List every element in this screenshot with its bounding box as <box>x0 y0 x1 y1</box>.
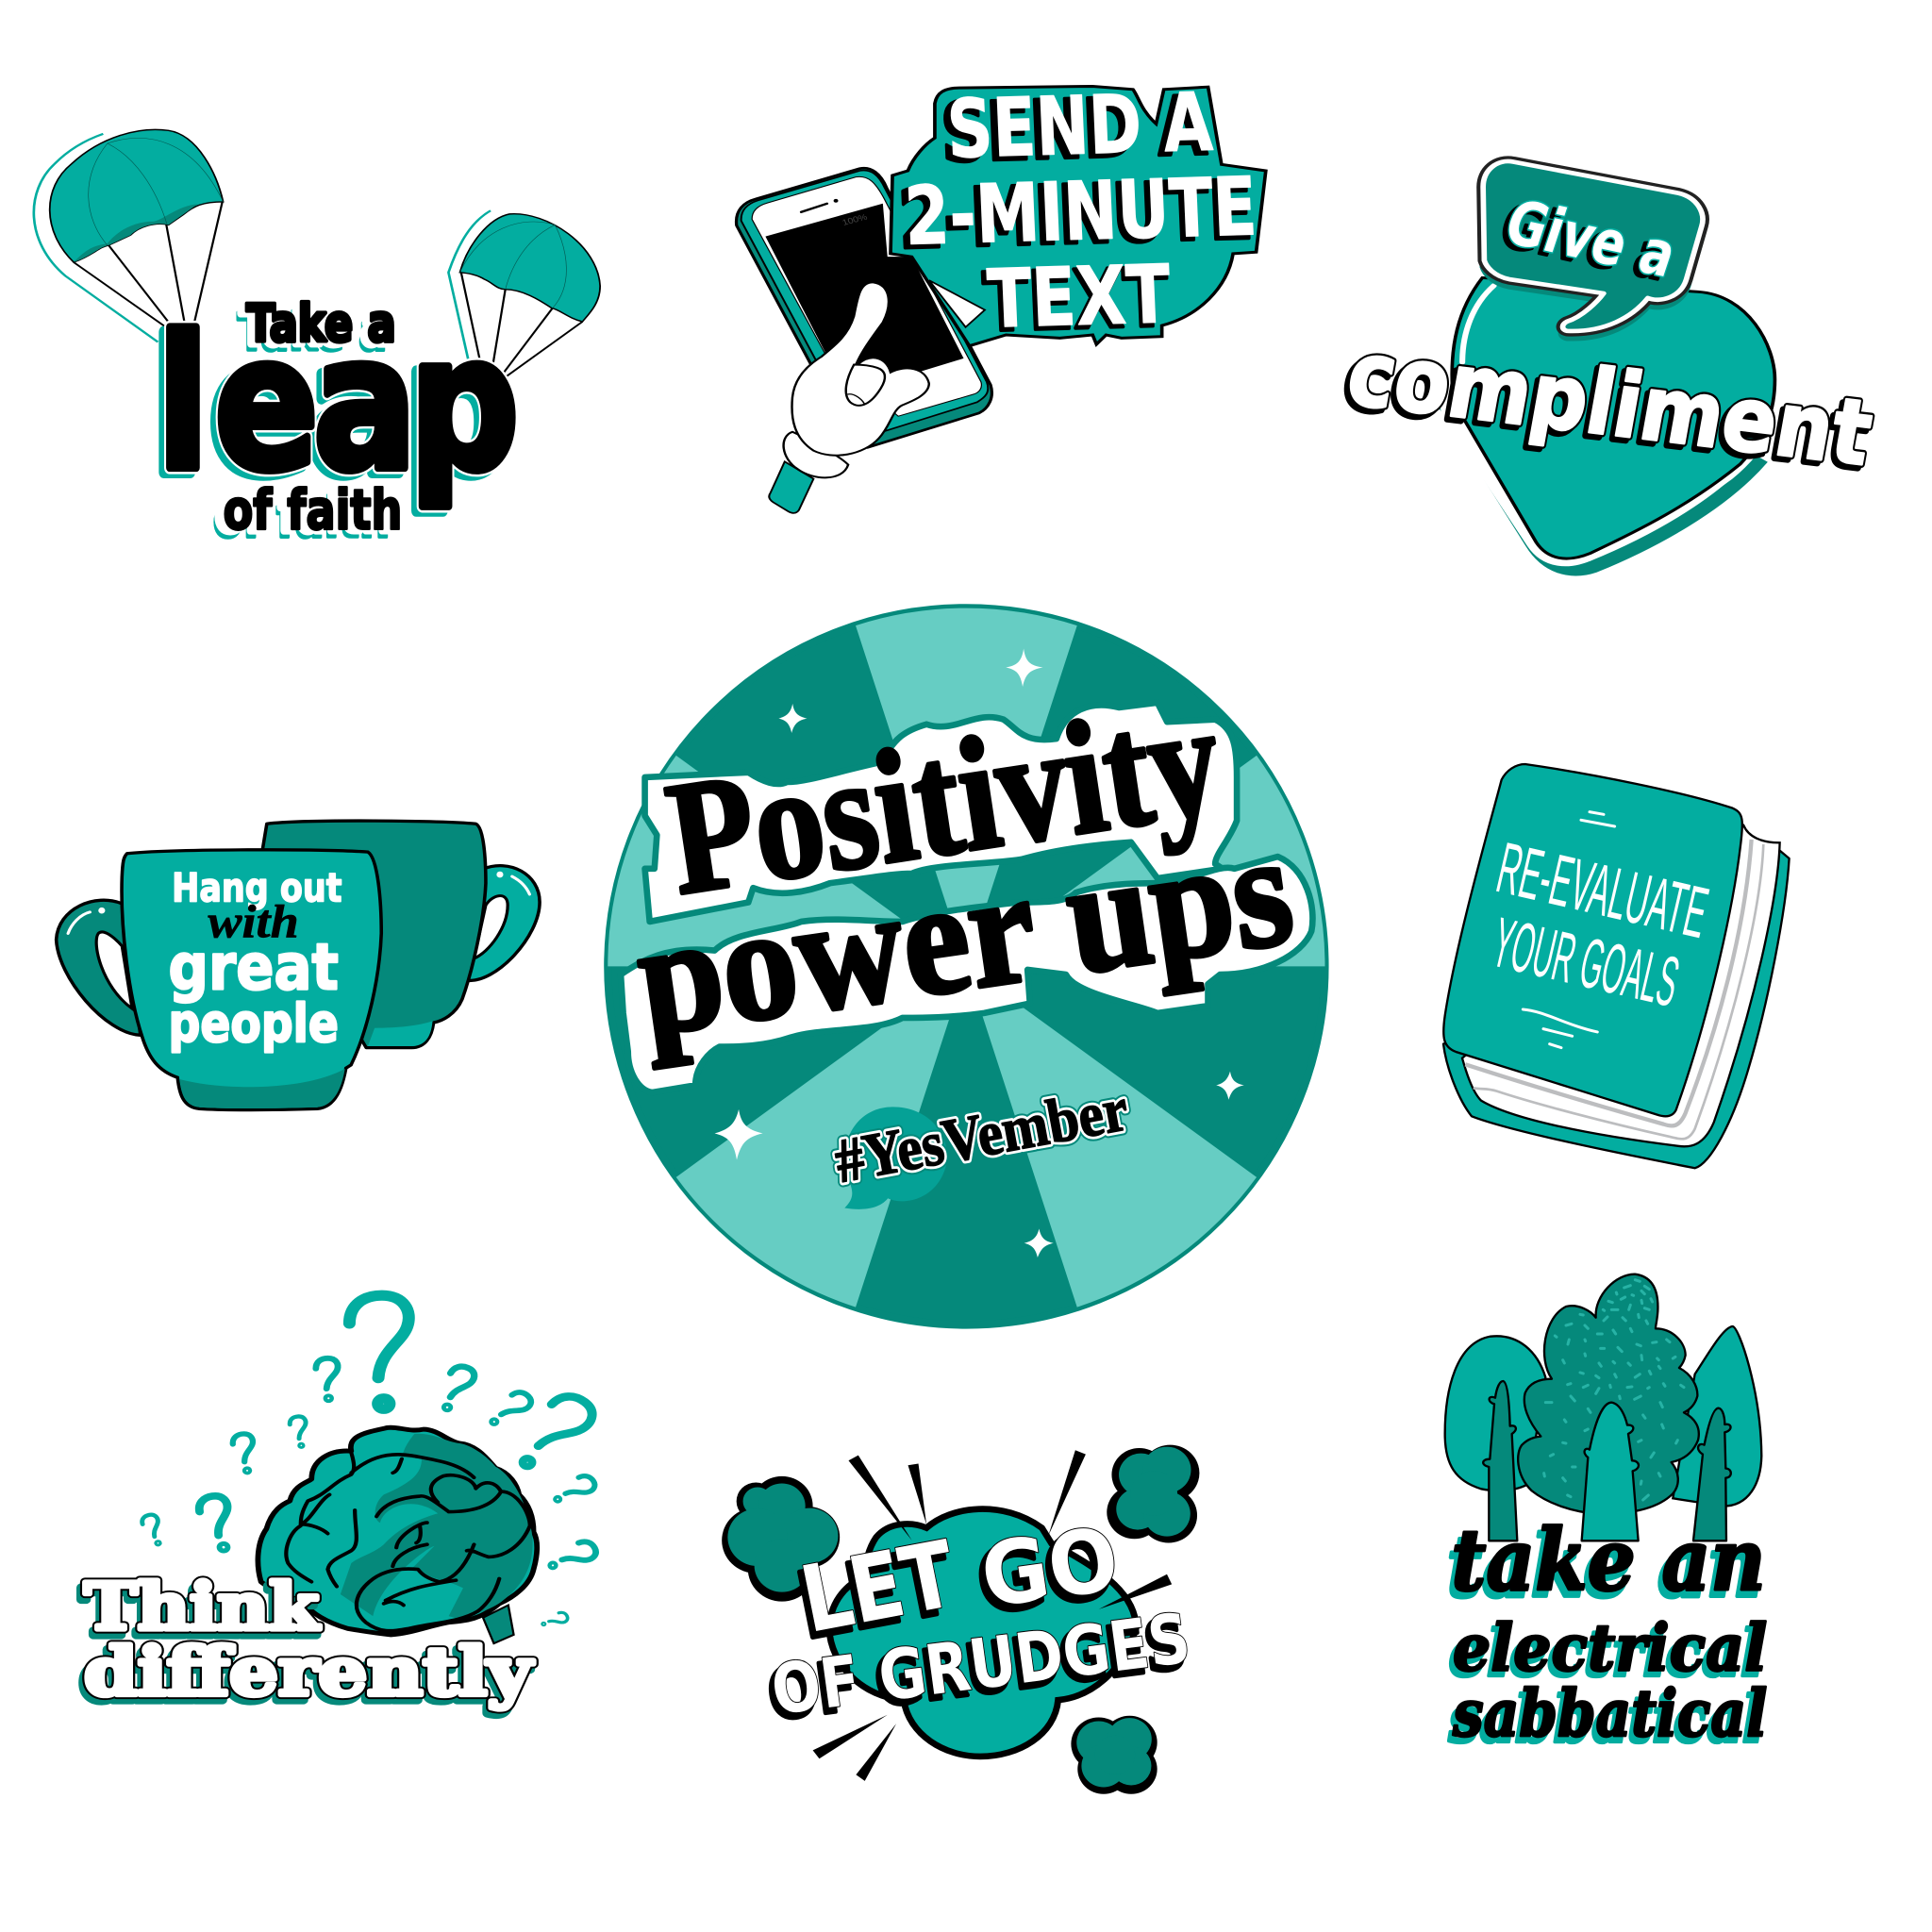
icon: pointing hand <box>791 282 929 456</box>
heading: SEND A <box>939 75 1214 180</box>
heading: of faith <box>213 479 402 550</box>
icon: tree trunks <box>1483 1381 1731 1541</box>
icon: book pages <box>1462 825 1780 1146</box>
heading: take an: take an <box>1447 1518 1761 1617</box>
heading: Take a <box>238 295 396 362</box>
heading: TEXT: TEXT <box>981 251 1170 350</box>
heading: Give a: Give a <box>1491 191 1679 295</box>
icon: arm <box>769 461 813 513</box>
heading: electrical: electrical <box>1453 1611 1767 1687</box>
sticker: take an electrical sabbatical <box>1445 1274 1767 1757</box>
icon: YesVember bubble <box>844 1107 947 1209</box>
icon: front mug handle <box>57 900 141 1035</box>
heading: differently: differently <box>84 1633 534 1710</box>
heading: SEND A: SEND A <box>939 79 1208 180</box>
heading: TEXT <box>981 247 1173 350</box>
heading: power ups: power ups <box>626 799 1303 1069</box>
heading: OF GRUDGES: OF GRUDGES <box>763 1604 1191 1737</box>
icon: centre tree <box>1518 1274 1699 1514</box>
heading: sabbatical: sabbatical <box>1452 1676 1767 1752</box>
icon: explosion cloud <box>829 1509 1136 1757</box>
heading: Take a: Take a <box>246 295 396 354</box>
sticker: send a 2-minute text <box>737 75 1266 513</box>
heading: LET: LET <box>793 1522 964 1654</box>
panel: speech bubble <box>891 86 1266 346</box>
icon: brain <box>258 1427 537 1635</box>
heading: Think: Think <box>84 1568 320 1645</box>
panel: speech bubble <box>1483 161 1703 338</box>
heading: leap: leap <box>151 301 513 517</box>
sticker: re-evaluate your goals <box>1443 764 1790 1168</box>
icon: book front cover <box>1443 764 1742 1116</box>
icon: back mug <box>260 821 486 1048</box>
heading: YesVember hashtag: #YesVember <box>830 1074 1133 1196</box>
heading: LET: LET <box>793 1522 964 1654</box>
icon: left tree <box>1445 1336 1545 1491</box>
icon: right parachute <box>448 210 600 377</box>
icon: right tree <box>1673 1326 1761 1507</box>
icon: question marks <box>141 1295 599 1628</box>
sticker: let go of grudges <box>722 1445 1199 1794</box>
heading: 2-MINUTE <box>896 159 1258 267</box>
icon: left parachute <box>34 129 224 342</box>
heading: Give a <box>1491 187 1685 295</box>
panel: sunburst circle <box>608 608 1324 1324</box>
heading: YesVember hashtag: #YesVember <box>830 1074 1133 1196</box>
icon: sparkles <box>715 649 1244 1257</box>
icon: small smoke clouds <box>722 1445 1199 1794</box>
heading: LET: LET <box>789 1528 960 1660</box>
heading: great: great <box>169 929 339 1005</box>
heading: leap: leap <box>157 296 519 512</box>
central badge: positivity power ups <box>608 608 1324 1324</box>
text: battery: 100% <box>841 212 869 228</box>
heading: YesVember hashtag: #YesVember <box>830 1074 1133 1196</box>
heading: OF GRUDGES: OF GRUDGES <box>767 1598 1195 1731</box>
sticker: think differently <box>80 1295 599 1716</box>
icon: brain stem <box>483 1606 514 1643</box>
heading: Think: Think <box>84 1568 320 1645</box>
heading: of faith: of faith <box>224 479 402 542</box>
heading: of faith: of faith <box>213 488 390 550</box>
icon: heart <box>1446 273 1774 570</box>
heading: sabbatical: sabbatical <box>1447 1682 1763 1757</box>
heading: of faith: of faith <box>216 481 392 544</box>
sticker: give a compliment <box>1337 161 1879 570</box>
heading: Give a: Give a <box>1497 188 1685 291</box>
icon: front mug <box>122 850 381 1110</box>
icon: glove cuff <box>784 432 848 477</box>
sticker: take a leap of faith <box>34 129 600 550</box>
heading: Hang out: Hang out <box>172 866 341 911</box>
heading: people: people <box>169 992 339 1054</box>
heading: 2-MINUTE: 2-MINUTE <box>896 163 1255 267</box>
heading: Take a: Take a <box>238 304 387 362</box>
icon: burst lines <box>813 1450 1172 1781</box>
heading: Think: Think <box>80 1574 317 1651</box>
panel: title backing shape <box>621 703 1312 1092</box>
icon: book back cover <box>1443 837 1790 1168</box>
heading: leap: leap <box>157 296 519 512</box>
sticker: hang out with great people <box>57 821 540 1110</box>
heading: SEND A: SEND A <box>945 75 1214 176</box>
heading: TEXT: TEXT <box>986 247 1173 346</box>
text: with: with <box>208 896 299 948</box>
heading: differently: differently <box>80 1639 530 1716</box>
icon: back mug handle <box>467 866 540 980</box>
heading: differently: differently <box>84 1633 534 1710</box>
heading: GO: GO <box>975 1508 1124 1628</box>
icon: phone <box>737 168 991 447</box>
heading: electrical: electrical <box>1448 1617 1763 1692</box>
heading: GO: GO <box>971 1515 1121 1634</box>
heading: Positivity: Positivity <box>658 669 1231 929</box>
heading: 2-MINUTE: 2-MINUTE <box>903 159 1258 263</box>
icon: bubble tail <box>929 280 985 327</box>
heading: take an: take an <box>1451 1511 1766 1610</box>
heading: Take a: Take a <box>240 298 390 357</box>
